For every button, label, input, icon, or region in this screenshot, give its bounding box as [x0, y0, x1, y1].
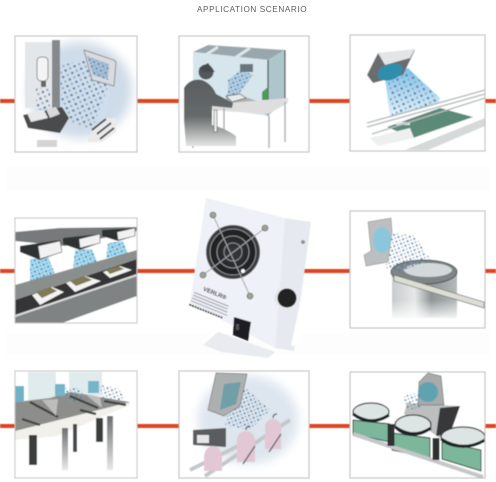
panel: PCB on rail — [350, 35, 485, 151]
side panel — [275, 218, 311, 351]
brand label — [189, 283, 234, 319]
panel: workbench with ionizers — [15, 371, 137, 478]
ion stream — [386, 232, 432, 272]
legs — [29, 416, 113, 470]
ion cones — [30, 241, 128, 281]
icon: rocker switch — [233, 317, 251, 341]
icon: gripper head — [37, 57, 48, 87]
bowls — [353, 403, 485, 447]
device: central ion fan — [189, 198, 311, 358]
ion stream — [225, 388, 270, 430]
bottles — [204, 419, 281, 471]
panel: green sorting bowls — [350, 372, 485, 478]
screws — [200, 212, 304, 299]
ion blowers — [15, 381, 126, 402]
ion stream — [36, 88, 50, 110]
icon: ionizer heads — [20, 228, 135, 260]
front panel — [190, 198, 285, 348]
green blocks — [353, 420, 481, 471]
title: APPLICATION SCENARIO — [197, 5, 307, 14]
panel: robot arm station — [15, 36, 137, 152]
trays — [32, 266, 132, 305]
panel: overhead ionizers on conveyor — [15, 218, 137, 323]
icon: fan grille — [203, 215, 265, 296]
glass cabinet — [193, 45, 285, 116]
panel: vibratory feeder bowl — [350, 211, 485, 328]
icon: control knob — [274, 288, 296, 308]
icon: ionizer head — [364, 218, 392, 266]
operator silhouette — [184, 63, 236, 146]
brand label: VERLR® — [202, 286, 228, 302]
icon: ionizer head — [240, 64, 253, 72]
connector lines: red-orange — [0, 99, 496, 428]
panel: pneumatic bottles — [179, 371, 309, 478]
panel: operator at glass enclosure — [179, 36, 309, 152]
blue ion beam — [385, 68, 440, 118]
icon: ionizer head — [208, 373, 247, 416]
icon: ionizer head — [84, 50, 116, 86]
icon: ionizer head — [418, 373, 444, 405]
icon: ionizer head — [367, 49, 415, 84]
